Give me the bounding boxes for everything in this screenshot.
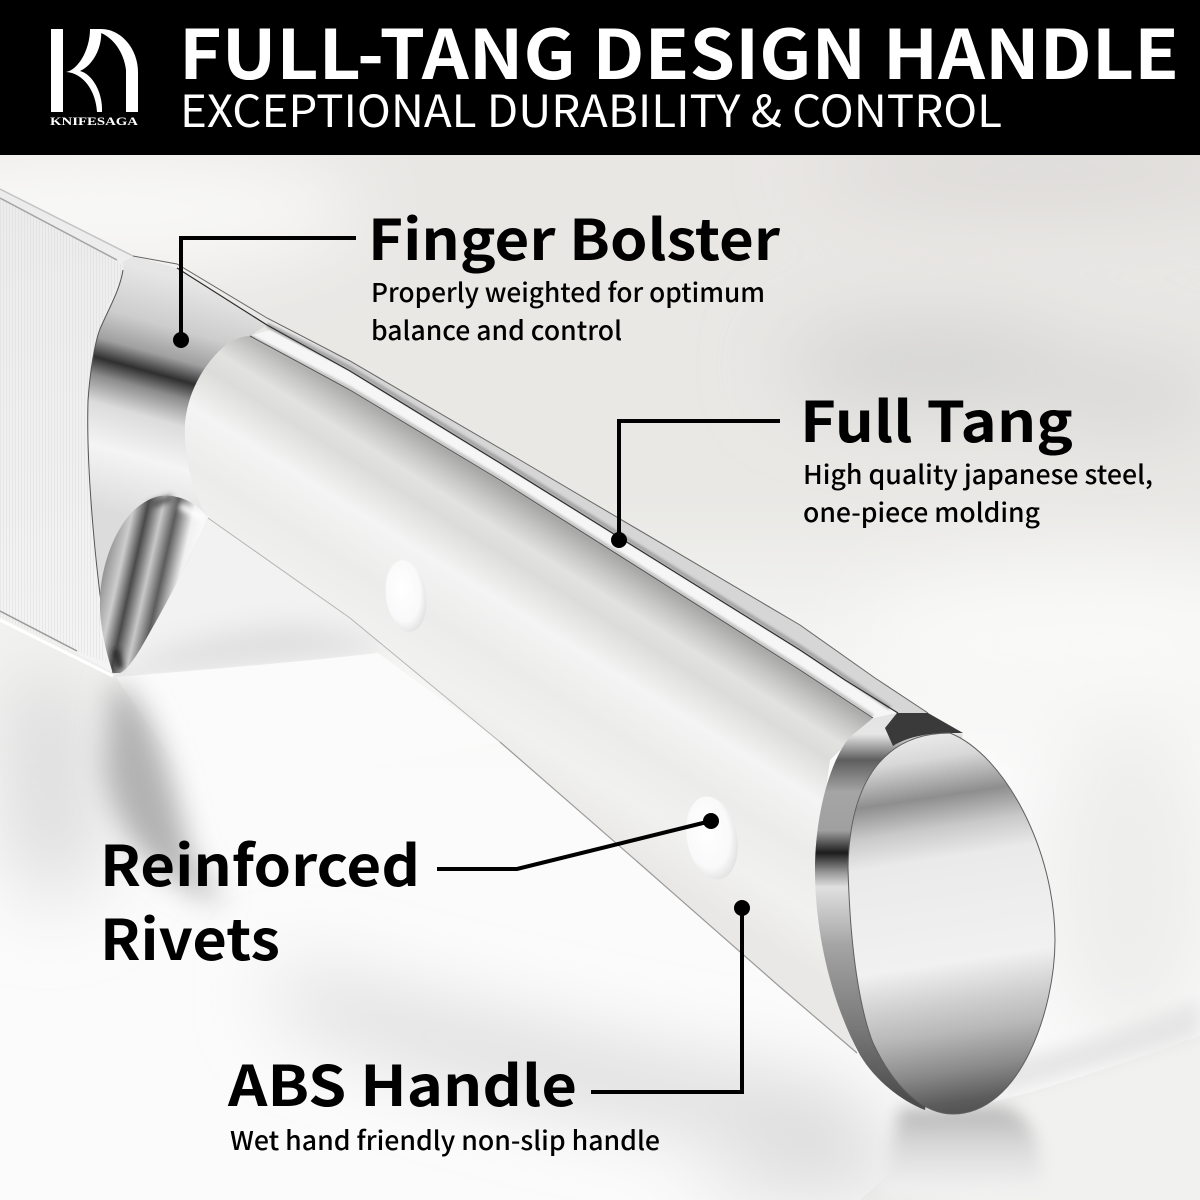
finger bolster (88, 256, 267, 673)
leader line: full tang (619, 421, 780, 540)
description: ABS handle: Wet hand friendly non-slip handle (230, 1121, 660, 1158)
full tang steel spine (133, 256, 928, 718)
title: FULL-TANG DESIGN HANDLE (179, 0, 1179, 99)
subtitle: EXCEPTIONAL DURABILITY & CONTROL (180, 76, 1002, 140)
butt cap face (848, 733, 1055, 1114)
floor: bottom soft shadows (0, 670, 900, 1200)
shadow streak below knife tip (104, 680, 225, 905)
leader line: ABS handle (591, 908, 742, 1092)
description: finger bolster: Properly weighted for optimum (371, 273, 765, 310)
logo: Knifesaga (50, 29, 138, 128)
reflection under butt cap (880, 1106, 1042, 1195)
header bar (0, 0, 1200, 155)
description: full tang (803, 455, 1153, 530)
heading: Finger Bolster: Finger Bolster (368, 196, 781, 277)
marker dot: reinforced rivets (703, 813, 719, 829)
heading: Reinforced Rivets: Reinforced (100, 822, 420, 903)
heel of bolster (100, 496, 208, 673)
description: finger bolster (371, 273, 765, 348)
heading: Full Tang: Full Tang (800, 378, 1073, 459)
logo: Knifesaga: KNIFESAGA (50, 114, 138, 128)
butt cap rim (815, 713, 963, 1110)
rivet: upper (381, 558, 431, 634)
callout: ABS handle (227, 900, 750, 1158)
description: full tang: High quality japanese steel, (803, 455, 1153, 492)
floor: right side (860, 1036, 1200, 1200)
leader line: finger bolster (181, 238, 356, 340)
heading: Reinforced Rivets (100, 822, 420, 977)
marker dot: finger bolster (173, 332, 189, 348)
floor between heel and handle (115, 518, 378, 676)
handle (185, 336, 873, 1053)
description: full tang: one-piece molding (803, 493, 1040, 530)
heading: ABS Handle: ABS Handle (227, 1042, 577, 1123)
leader line: reinforced rivets (437, 821, 711, 869)
rivet: lower (679, 792, 745, 884)
heading: Reinforced Rivets: Rivets (100, 896, 280, 977)
marker dot: full tang (611, 532, 627, 548)
description: finger bolster: balance and control (371, 311, 622, 348)
knife blade (0, 189, 133, 676)
marker dot: ABS handle (734, 900, 750, 916)
callout: full tang (611, 378, 1153, 548)
callout: reinforced rivets (100, 813, 719, 977)
callout: finger bolster (173, 196, 781, 348)
